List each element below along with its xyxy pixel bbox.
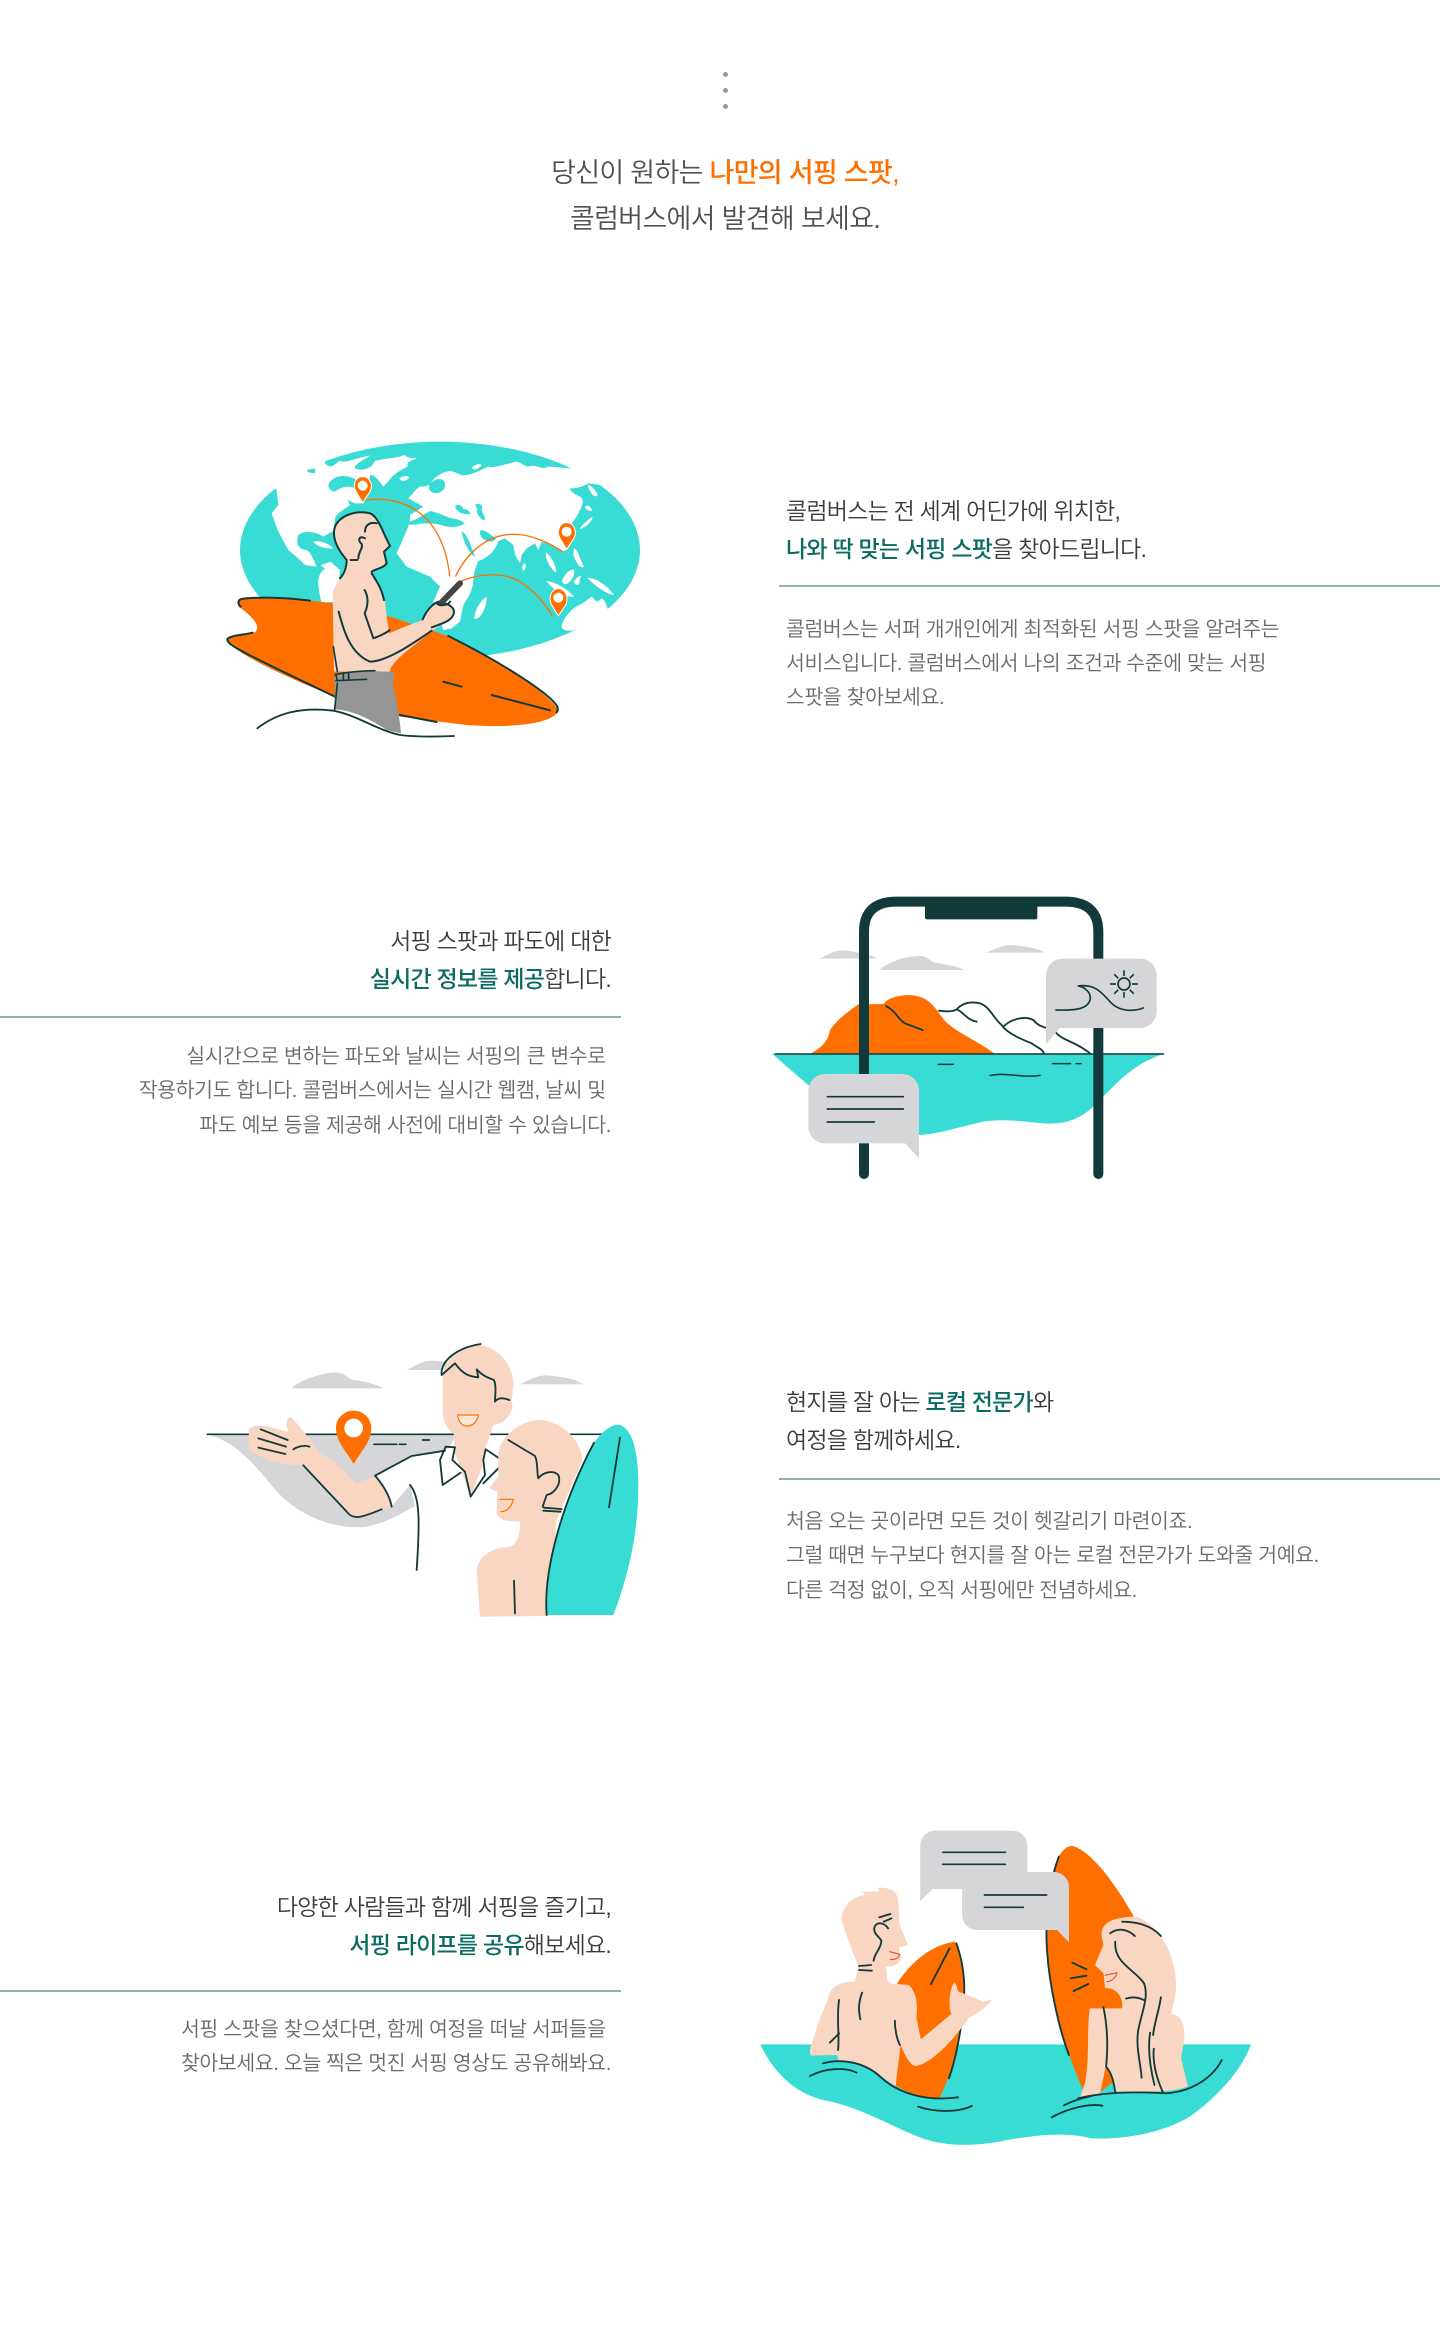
left board bbox=[895, 1942, 964, 2098]
surfer body bbox=[333, 512, 454, 672]
section 4 heading bbox=[277, 1894, 611, 1958]
dots icon bbox=[723, 72, 728, 109]
guide arm bbox=[248, 1417, 392, 1518]
right board bbox=[1046, 1846, 1156, 2093]
guide shirt bbox=[375, 1446, 523, 1617]
title: 당신이 원하는 나만의 서핑 스팟, bbox=[551, 158, 899, 188]
section 1 text: 콜럼버스는 서퍼 개개인에게 최적화된 서핑 스팟을 알려주는 bbox=[786, 618, 1279, 640]
illustration: surfers talking bbox=[760, 1831, 1251, 2145]
section 2 text: 파도 예보 등을 제공해 사전에 대비할 수 있습니다. bbox=[199, 1114, 611, 1137]
illustration: phone with island bbox=[772, 902, 1165, 1174]
guide face bbox=[443, 1345, 513, 1497]
section 1 text: 서비스입니다. 콜럼버스에서 나의 조건과 수준에 맞는 서핑 bbox=[786, 652, 1266, 675]
section 2 heading: 서핑 스팟과 파도에 대한 bbox=[390, 928, 611, 954]
section 1 heading: 콜럼버스는 전 세계 어딘가에 위치한, bbox=[786, 498, 1120, 524]
section 3 heading: 현지를 잘 아는 로컬 전문가와 bbox=[786, 1389, 1053, 1415]
section 3 text: 처음 오는 곳이라면 모든 것이 헷갈리기 마련이죠. bbox=[786, 1510, 1192, 1533]
south america bbox=[300, 552, 340, 603]
section 3 text: 다른 걱정 없이, 오직 서핑에만 전념하세요. bbox=[786, 1579, 1137, 1602]
section 4 text bbox=[181, 2018, 611, 2075]
section 4 text: 찾아보세요. 오늘 찍은 멋진 서핑 영상도 공유해봐요. bbox=[181, 2052, 611, 2075]
section 2 text: 실시간으로 변하는 파도와 날씨는 서핑의 큰 변수로 bbox=[186, 1045, 606, 1068]
phone outline bbox=[864, 902, 1098, 1174]
chat bubble 2 bbox=[962, 1872, 1069, 1942]
route arcs bbox=[367, 499, 563, 615]
section 4 text: 서핑 스팟을 찾으셨다면, 함께 여정을 떠날 서퍼들을 bbox=[181, 2018, 606, 2041]
section 1 heading: 나와 딱 맞는 서핑 스팟을 찾아드립니다. bbox=[786, 536, 1146, 562]
section 3 text: 그럴 때면 누구보다 현지를 잘 아는 로컬 전문가가 도와줄 거예요. bbox=[786, 1544, 1319, 1567]
right surfer bbox=[1080, 1917, 1188, 2098]
section 4 heading: 다양한 사람들과 함께 서핑을 즐기고, bbox=[277, 1894, 611, 1920]
section 3 text bbox=[786, 1510, 1319, 1602]
americas bbox=[270, 455, 416, 567]
guide mouth bbox=[458, 1415, 478, 1426]
weather bubble bbox=[1046, 959, 1157, 1044]
section 4 heading: 서핑 라이프를 공유해보세요. bbox=[349, 1932, 611, 1958]
wave line bbox=[257, 710, 454, 737]
illustration: local guide bbox=[207, 1344, 638, 1617]
surfboard bbox=[227, 598, 558, 726]
phone bbox=[441, 583, 460, 603]
section 1 text: 스팟을 찾아보세요. bbox=[786, 686, 944, 709]
title: 콜럼버스에서 발견해 보세요. bbox=[570, 204, 880, 234]
shorts bbox=[334, 671, 401, 733]
illustration: surfer with world map bbox=[227, 442, 640, 737]
second person bbox=[477, 1420, 583, 1617]
section 2 heading: 실시간 정보를 제공합니다. bbox=[370, 966, 611, 992]
map pins bbox=[354, 477, 575, 616]
section 1 heading bbox=[786, 498, 1146, 562]
text bubble bbox=[808, 1074, 919, 1158]
section 3 heading bbox=[786, 1389, 1054, 1453]
teal surfboard bbox=[546, 1425, 638, 1615]
section 2 text bbox=[139, 1045, 611, 1137]
title bbox=[551, 158, 899, 234]
eurasia and africa bbox=[397, 462, 620, 632]
section 1 text bbox=[786, 618, 1279, 709]
section 3 heading: 여정을 함께하세요. bbox=[786, 1427, 960, 1453]
left surfer bbox=[810, 1888, 992, 2087]
location pin bbox=[336, 1411, 371, 1464]
water lines bbox=[810, 2060, 1222, 2117]
surfer outlines bbox=[334, 512, 454, 662]
section 2 text: 작용하기도 합니다. 콜럼버스에서는 실시간 웹캠, 날씨 및 bbox=[139, 1079, 606, 1102]
chat bubble 1 bbox=[920, 1831, 1027, 1901]
section 2 heading bbox=[370, 928, 611, 992]
